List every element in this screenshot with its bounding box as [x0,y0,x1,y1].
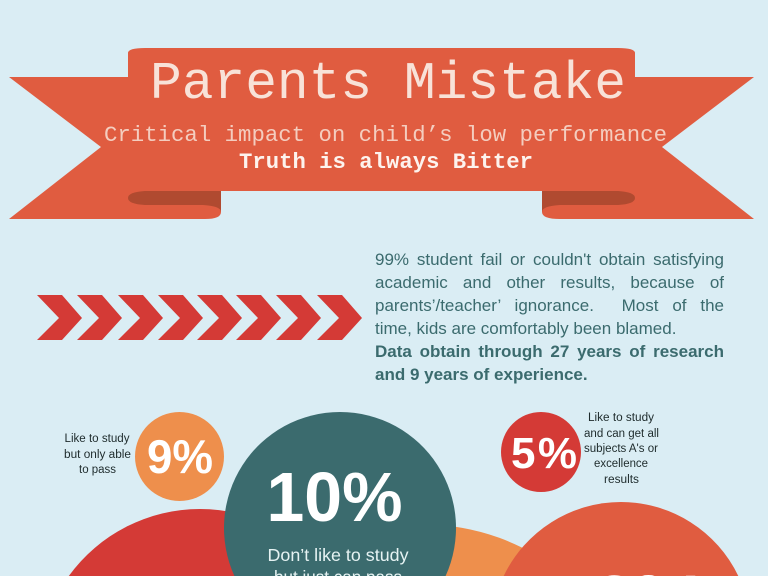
intro paragraph: time, kids are comfortably been blamed. [375,319,676,338]
10 percent label: Don’t like to study [268,545,409,565]
stat: 5 percent [501,412,581,492]
circle: 10 percent stat [224,412,456,576]
circle: coral large stat [504,502,738,576]
intro paragraph: parents’/teacher’ ignorance. Most of the [375,296,724,315]
5 percent description: subjects A's or [584,443,658,455]
subtitle: Critical impact on child’s low performance [104,122,667,148]
10 percent value: 10% [266,458,402,536]
5 percent description: excellence [594,458,648,470]
ribbon left fold [128,191,221,212]
intro paragraph: 99% student fail or couldn't obtain satisfying [375,250,724,269]
arrow: row of red chevrons [37,295,362,340]
9 percent description: to pass [79,464,116,476]
title ribbon banner [9,48,754,219]
9 percent value: 9% [147,430,213,483]
intro paragraph: and 9 years of experience. [375,365,588,384]
intro paragraph [375,250,724,384]
circle: red large [69,509,331,576]
title: Parents Mistake [150,54,626,114]
5 percent description: and can get all [584,428,659,440]
coral circle [504,502,738,576]
tagline: Truth is always Bitter [239,149,533,175]
stat: 9 percent [135,412,224,501]
intro paragraph: academic and other results, because of [375,273,724,292]
5 percent description: results [604,474,639,486]
red circle [501,412,581,492]
9 percent description [64,433,131,476]
ribbon right fold [542,191,635,212]
ribbon body [9,48,754,219]
orange circle [135,412,224,501]
9 percent description: Like to study [64,433,130,445]
teal circle [224,412,456,576]
9 percent description: but only able [64,449,131,461]
5 percent description [584,412,659,486]
5 percent value: 5% [511,429,577,478]
intro paragraph: Data obtain through 27 years of research [375,342,724,361]
circle: orange large, background [283,525,565,576]
5 percent description: Like to study [588,412,654,424]
